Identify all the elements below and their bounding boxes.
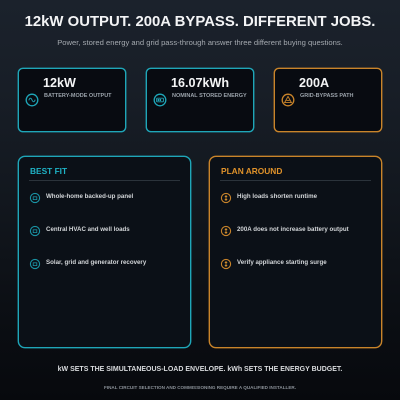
- takeaway line: kW SETS THE SIMULTANEOUS-LOAD ENVELOPE. kWh SETS THE ENERGY BUDGET.: [58, 366, 342, 372]
- icon: battery: [154, 94, 166, 106]
- panel: plan around: [209, 156, 382, 348]
- icon: check 2: [30, 226, 40, 236]
- heading: best fit: BEST FIT: [30, 166, 67, 176]
- list item: Solar, grid and generator recovery: [46, 259, 146, 266]
- stat value: 12kW: 12kW: [43, 76, 76, 90]
- icon: alert 3: [220, 258, 232, 270]
- icon: sine wave: [26, 94, 38, 106]
- list item: High loads shorten runtime: [237, 193, 317, 200]
- panel: best fit: [18, 156, 191, 348]
- stat label: battery-mode output: BATTERY-MODE OUTPUT: [44, 92, 112, 98]
- stat card: 16.07kWh: [146, 68, 254, 132]
- list item: Central HVAC and well loads: [46, 226, 130, 233]
- title: 12kW OUTPUT. 200A BYPASS. DIFFERENT JOBS.: [25, 14, 375, 30]
- icon: bypass triangle: [282, 94, 294, 106]
- stat value: 16.07kWh: 16.07kWh: [171, 76, 229, 90]
- subtitle: Power, stored energy and grid pass-through answer three different buying questions.: [57, 38, 343, 47]
- heading: plan around: PLAN AROUND: [221, 166, 282, 176]
- stat card: 12kW: [18, 68, 126, 132]
- icon: check 3: [30, 258, 40, 270]
- footnote: FINAL CIRCUIT SELECTION AND COMMISSIONING REQUIRE A QUALIFIED INSTALLER.: [104, 384, 296, 390]
- list item: Whole-home backed-up panel: [46, 193, 133, 200]
- list item: 200A does not increase battery output: [237, 226, 349, 233]
- icon: alert 1: [220, 192, 232, 204]
- list item: Verify appliance starting surge: [237, 259, 327, 266]
- stat label: grid-bypass path: GRID-BYPASS PATH: [300, 92, 353, 98]
- stat value: 200A: 200A: [299, 76, 329, 90]
- stat label: nominal stored energy: NOMINAL STORED ENERGY: [172, 92, 247, 98]
- icon: check 1: [30, 192, 40, 204]
- stat card: 200A: [274, 68, 382, 132]
- icon: alert 2: [220, 226, 232, 236]
